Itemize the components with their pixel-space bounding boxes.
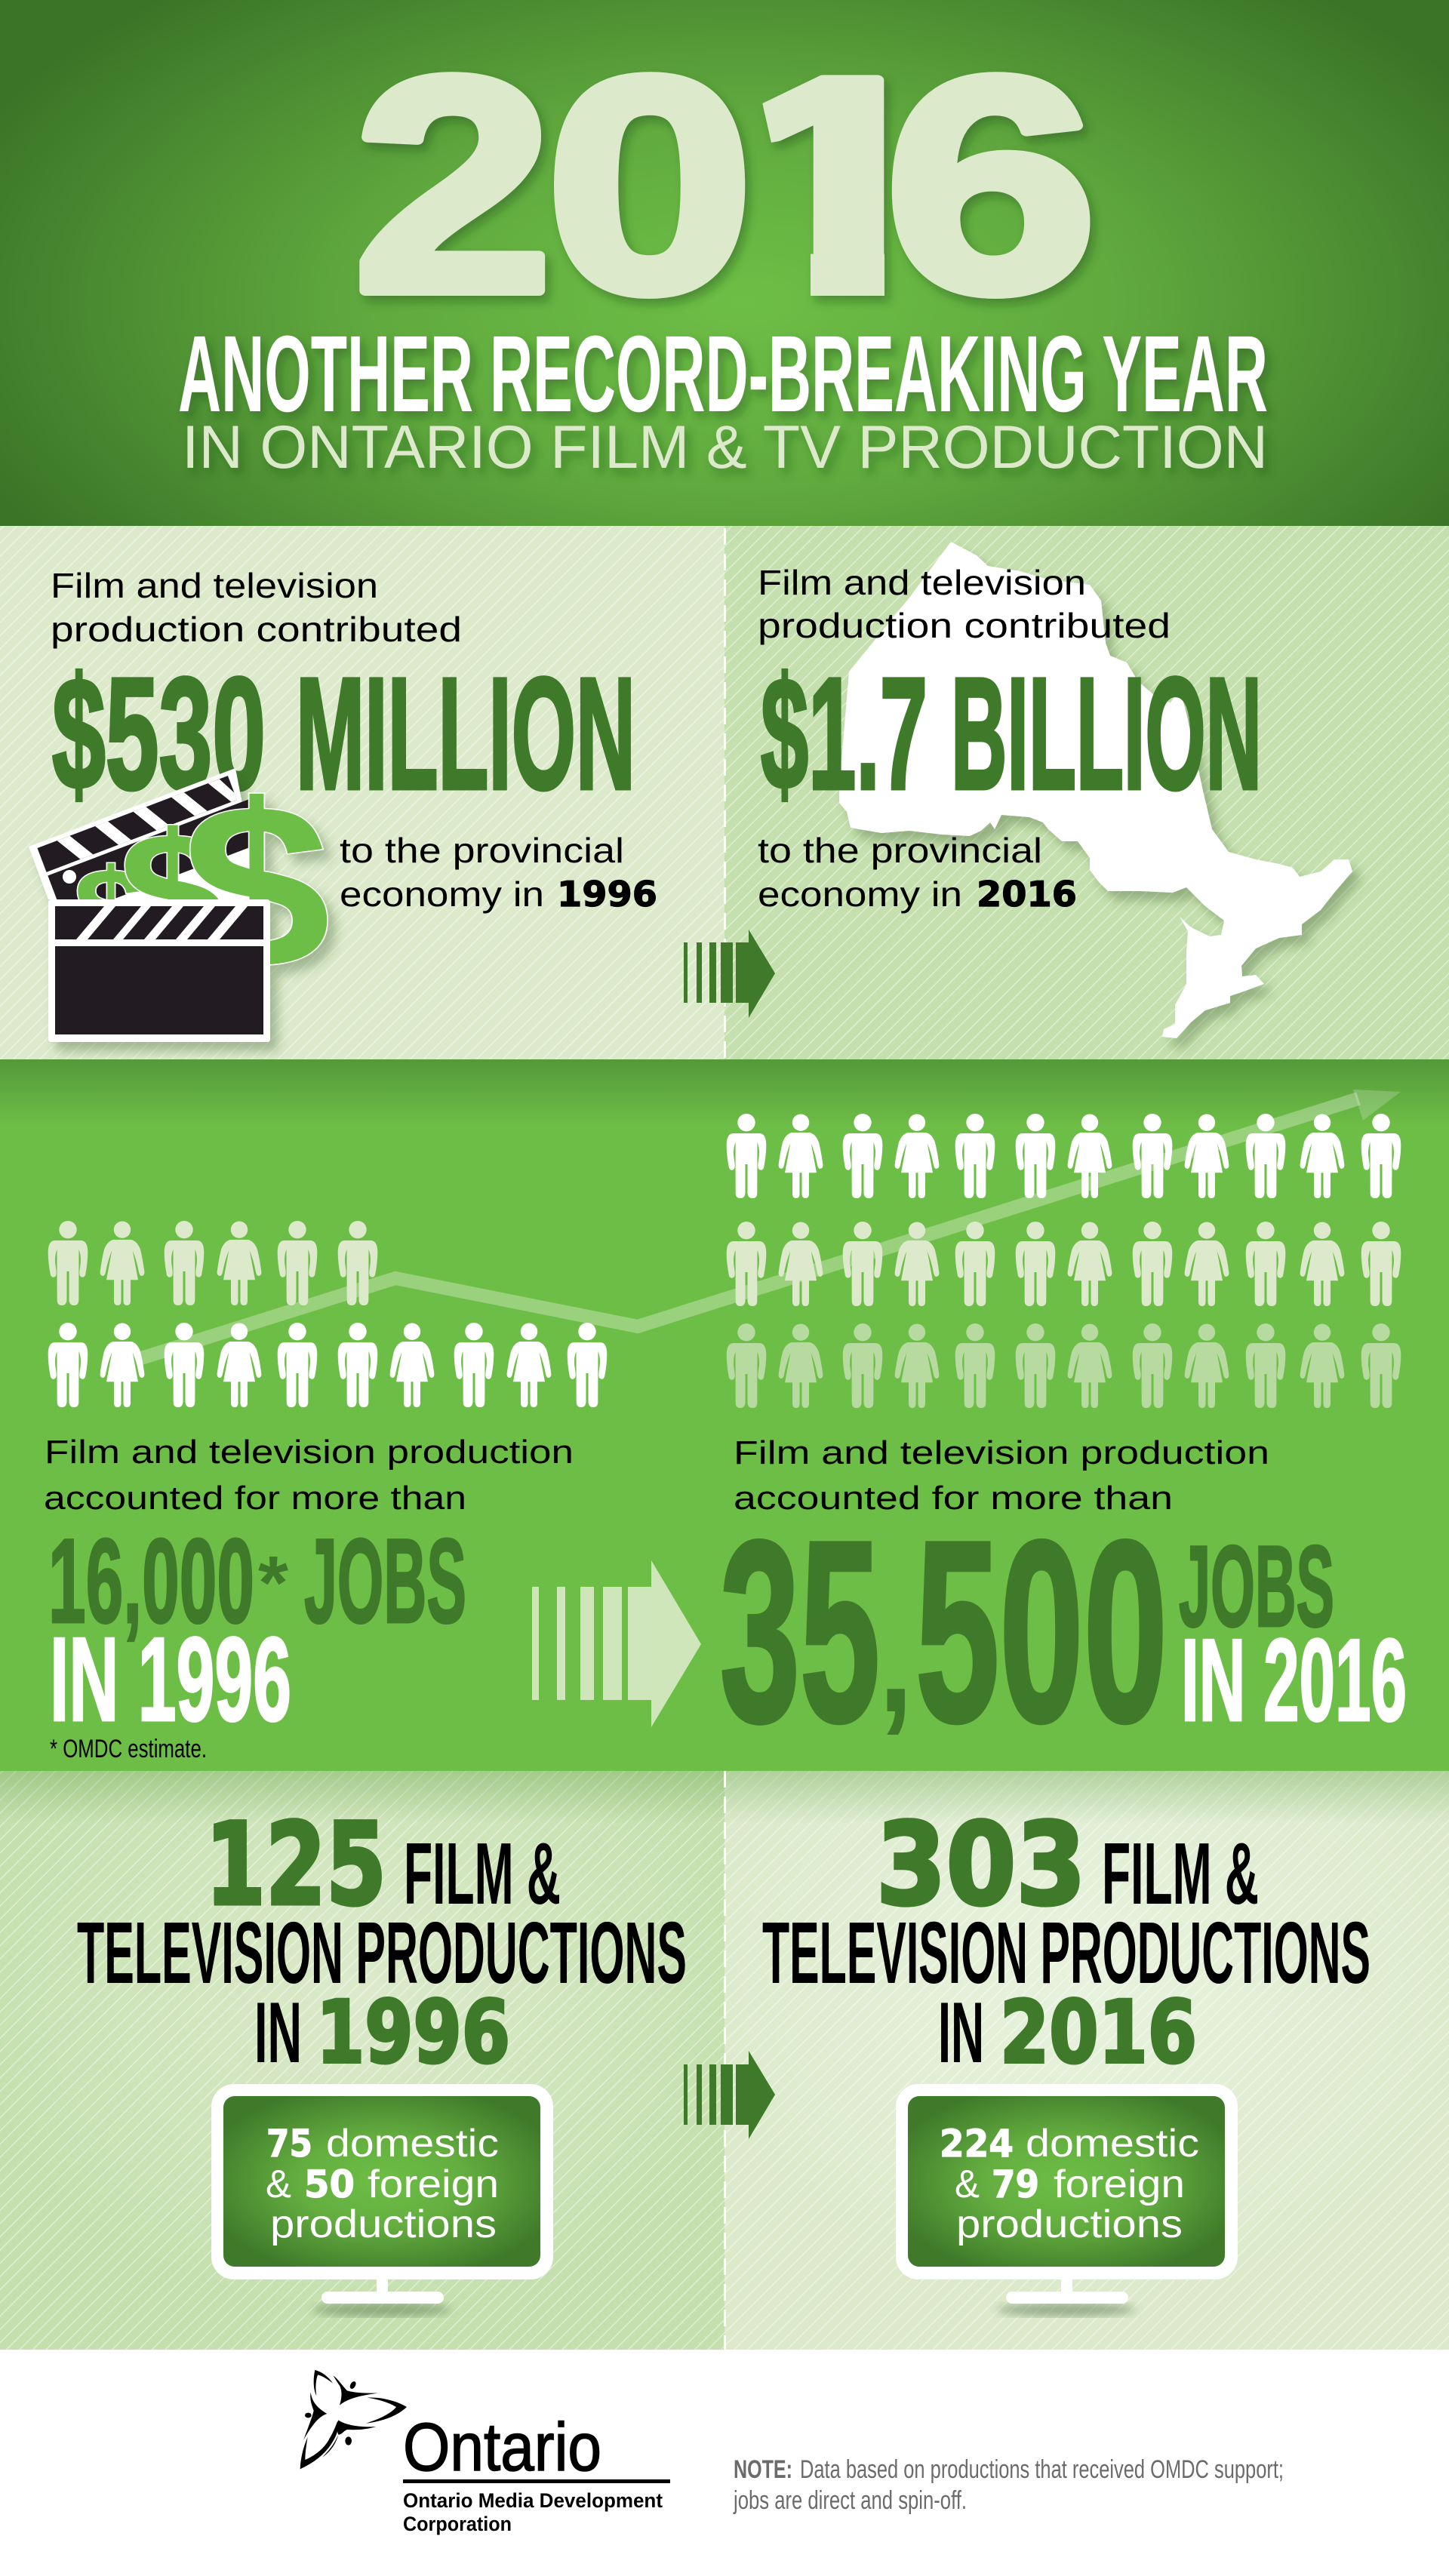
- note: data source: Data based on productions that received OMDC support;: [800, 2455, 1284, 2484]
- text: 224 domestic and 79 foreign productions: [940, 2122, 1199, 2246]
- title: 2016: 1: [724, 14, 953, 355]
- icon: television 2016: [896, 2084, 1238, 2316]
- figure: 35,500 jobs in 2016: [720, 1488, 1407, 1775]
- text: film and television production contributed: [51, 566, 462, 649]
- text: 75 domestic and 50 foreign productions: productions: [270, 2203, 497, 2246]
- text: film and television production contributed: [758, 563, 1171, 645]
- text: film and television production contributed: Film and television: [51, 566, 378, 605]
- text: to the provincial economy in 2016: 2016: [977, 874, 1077, 915]
- arrow: jobs comparison: [532, 1560, 701, 1727]
- text: 75 domestic and 50 foreign productions: domestic: [326, 2122, 499, 2166]
- figure: 35,500 jobs in 2016: ,: [878, 1575, 913, 1744]
- icon: clapperboard with dollar signs: $: [181, 756, 331, 1017]
- figure: 16,000 jobs in 1996: *: [258, 1541, 288, 1625]
- note: data source: [733, 2455, 1284, 2515]
- text: film and television production contributed: production contributed: [51, 610, 462, 649]
- text: jobs 1996 intro: [44, 1434, 574, 1517]
- text: to the provincial economy in 1996: [340, 831, 657, 915]
- icon: clapperboard with dollar signs: $: [73, 845, 148, 975]
- panel: economy 2016: [724, 526, 1449, 1059]
- heading: 125 film and television productions in 1996: [77, 1800, 687, 2083]
- title: 2016: 6: [884, 14, 1097, 355]
- text: 224 domestic and 79 foreign productions: productions: [956, 2203, 1183, 2246]
- figure: 16,000 jobs in 1996: 16,000: [48, 1514, 254, 1648]
- text: film and television production contributed: Film and television: [758, 563, 1086, 602]
- heading: 303 film and television productions in 2016: FILM &: [1102, 1824, 1259, 1923]
- heading: 125 film and television productions in 1996: TELEVISION PRODUCTIONS: [77, 1904, 687, 2002]
- text: 75 domestic and 50 foreign productions: 50: [304, 2163, 355, 2206]
- text: 75 domestic and 50 foreign productions: foreign: [368, 2163, 499, 2206]
- heading: 125 film and television productions in 1996: IN: [254, 1985, 302, 2081]
- text: 224 domestic and 79 foreign productions: &: [955, 2163, 980, 2206]
- logo: Ontario trillium: [300, 2370, 407, 2469]
- figure: $1.7 billion: $1.7: [761, 644, 928, 822]
- heading: 125 film and television productions in 1996: FILM &: [404, 1824, 561, 1923]
- figure: 16,000 jobs in 1996: IN 1996: [50, 1613, 291, 1746]
- heading: 125 film and television productions in 1996: 125: [205, 1800, 386, 1931]
- note: data source: jobs are direct and spin-off.: [733, 2486, 967, 2515]
- title: 2016: 2: [353, 14, 553, 355]
- title: 2016: 0: [546, 14, 754, 355]
- icon: television 1996: [211, 2084, 553, 2316]
- logo: Ontario wordmark: Ontario: [403, 2410, 601, 2485]
- icons: people 2016, pale row: [727, 1222, 1401, 1306]
- logo: Ontario wordmark: [403, 2410, 670, 2535]
- text: 75 domestic and 50 foreign productions: 75: [266, 2122, 312, 2166]
- figure: 16,000 jobs in 1996: [48, 1514, 466, 1746]
- text: jobs 2016 intro: [734, 1434, 1269, 1517]
- icons: people 2016, white row: [727, 1114, 1401, 1198]
- heading: 303 film and television productions in 2016: IN: [938, 1985, 984, 2081]
- text: 75 domestic and 50 foreign productions: &: [266, 2163, 291, 2206]
- panel: economy 1996: [0, 526, 724, 1059]
- icon: clapperboard with dollar signs: [29, 756, 331, 1042]
- icons: people 1996, faded row: [48, 1221, 377, 1305]
- heading: 303 film and television productions in 2016: [762, 1800, 1371, 2083]
- arrow: productions comparison: [684, 2051, 775, 2139]
- figure: $530 million: $530: [52, 644, 266, 822]
- panel: header: [0, 0, 1449, 526]
- figure: 35,500 jobs in 2016: 500: [915, 1488, 1168, 1775]
- text: 224 domestic and 79 foreign productions: 224: [940, 2122, 1014, 2166]
- figure: $1.7 billion: [761, 644, 1262, 822]
- text: to the provincial economy in 2016: [758, 831, 1077, 915]
- figure: $530 million: [52, 644, 635, 822]
- text: to the provincial economy in 2016: economy in: [758, 875, 962, 914]
- text: jobs 2016 intro: accounted for more than: [734, 1480, 1173, 1517]
- text: film and television production contributed: production contributed: [758, 606, 1171, 645]
- text: to the provincial economy in 1996: to the provincial: [340, 831, 624, 870]
- logo: Ontario wordmark: Corporation: [403, 2513, 512, 2535]
- text: to the provincial economy in 1996: 1996: [557, 874, 657, 915]
- heading: 125 film and television productions in 1996: 1996: [316, 1982, 510, 2083]
- text: 75 domestic and 50 foreign productions: [266, 2122, 499, 2246]
- heading: 303 film and television productions in 2016: 2016: [1000, 1982, 1197, 2083]
- text: 224 domestic and 79 foreign productions: domestic: [1026, 2122, 1199, 2166]
- footnote: OMDC estimate: * OMDC estimate.: [50, 1735, 207, 1763]
- subheading: in Ontario film and TV production: IN ONTARIO FILM & TV PRODUCTION: [182, 413, 1268, 481]
- panel: productions 2016: [724, 1771, 1449, 2350]
- panel: productions 1996: [0, 1771, 724, 2350]
- text: jobs 2016 intro: Film and television production: [734, 1434, 1269, 1471]
- icons: people 1996, white row: [48, 1323, 607, 1407]
- text: to the provincial economy in 2016: to the provincial: [758, 831, 1042, 870]
- figure: 35,500 jobs in 2016: 35: [720, 1488, 880, 1775]
- panel: jobs: JOBS: [304, 1514, 466, 1648]
- logo: Ontario wordmark: Ontario Media Development: [403, 2489, 663, 2512]
- text: jobs 1996 intro: accounted for more than: [44, 1480, 466, 1517]
- chart: rising trend arrow: [139, 1090, 1401, 1359]
- map: Ontario: [839, 542, 1352, 1038]
- text: 224 domestic and 79 foreign productions: foreign: [1054, 2163, 1185, 2206]
- icon: clapperboard with dollar signs: $: [118, 798, 226, 985]
- panel: jobs: [0, 1059, 1449, 1775]
- heading: 303 film and television productions in 2016: 303: [876, 1800, 1086, 1931]
- arrow: economy comparison: [684, 930, 775, 1018]
- text: to the provincial economy in 1996: economy in: [340, 875, 544, 914]
- figure: $530 million: MILLION: [296, 644, 635, 822]
- text: jobs 1996 intro: Film and television production: [45, 1434, 574, 1471]
- icons: people 2016, faded row: [727, 1323, 1401, 1408]
- note: data source: NOTE:: [734, 2455, 792, 2484]
- text: 224 domestic and 79 foreign productions: 79: [992, 2163, 1039, 2206]
- title: 2016: [359, 72, 1098, 309]
